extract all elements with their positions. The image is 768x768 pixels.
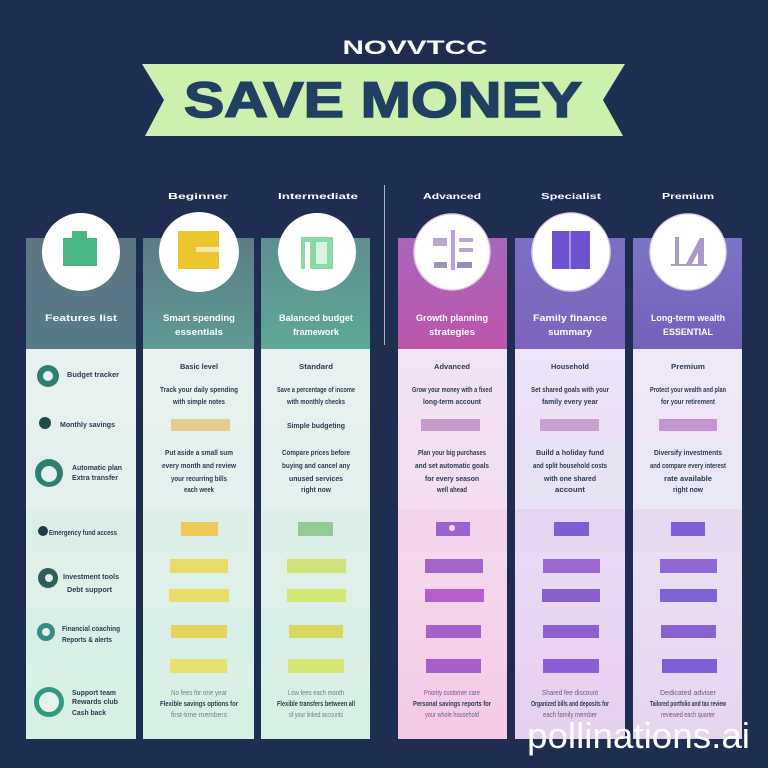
icon: pink ledger xyxy=(414,214,490,290)
plan cells: your whole household xyxy=(425,710,479,719)
icon: yellow ledger xyxy=(159,212,239,292)
plan heading xyxy=(416,313,488,337)
plan cells: Build a holiday fund xyxy=(536,448,604,457)
plan cells: No fees for one year xyxy=(171,688,227,697)
title banner xyxy=(142,64,625,136)
plan cells: Advanced xyxy=(434,362,470,371)
plan cells: Household xyxy=(551,362,589,371)
plan cells: with one shared xyxy=(543,474,596,483)
plan cells: Priority customer care xyxy=(424,688,480,697)
feature labels with icons: Extra transfer xyxy=(72,473,118,482)
plan cells: for every season xyxy=(425,474,479,483)
plan cells: Protect your wealth and plan xyxy=(650,385,726,394)
feature labels with icons: Budget tracker xyxy=(67,370,119,379)
icon: lavender ledger xyxy=(650,214,726,290)
column top labels: Beginner xyxy=(168,192,228,201)
plan cells: Dedicated adviser xyxy=(660,688,716,697)
panel: features column xyxy=(26,213,136,739)
plan heading: ESSENTIAL xyxy=(663,327,713,337)
feature labels with icons xyxy=(34,365,122,717)
feature labels with icons: Cash back xyxy=(72,708,107,717)
plan cells: Simple budgeting xyxy=(287,421,345,430)
plan heading: Balanced budget xyxy=(279,313,353,323)
plan heading xyxy=(279,313,353,337)
feature labels with icons: Financial coaching xyxy=(62,624,120,633)
plan cells: for your retirement xyxy=(661,397,715,406)
plan cells: with simple notes xyxy=(172,397,225,406)
column top labels: Intermediate xyxy=(278,192,359,201)
plan cells: Flexible savings options for xyxy=(160,699,238,708)
title banner: SAVE MONEY xyxy=(184,72,582,128)
panel: plan column 3 xyxy=(398,214,507,739)
feature labels with icons: Monthly savings xyxy=(60,420,115,429)
plan heading xyxy=(651,313,725,337)
panel: plan column 4 xyxy=(515,213,625,739)
column top labels: Specialist xyxy=(541,192,602,201)
plan cells xyxy=(277,362,355,719)
plan cells: Low fees each month xyxy=(288,688,344,697)
panel: plan column 1 xyxy=(143,212,254,739)
plan cells: each week xyxy=(184,485,215,494)
plan cells: Organized bills and deposits for xyxy=(531,699,609,708)
plan heading: Growth planning xyxy=(416,313,488,323)
feature labels with icons: Reports & alerts xyxy=(62,635,112,644)
plan cells: long-term account xyxy=(423,397,481,406)
plan heading: Family finance xyxy=(533,313,607,323)
column top labels: Advanced xyxy=(423,192,481,201)
plan cells: right now xyxy=(301,485,331,494)
plan heading xyxy=(163,313,235,337)
plan cells: Personal savings reports for xyxy=(413,699,491,708)
plan cells: Basic level xyxy=(180,362,218,371)
plan cells: family every year xyxy=(542,397,598,406)
plan cells: Track your daily spending xyxy=(160,385,238,394)
plan cells: buying and cancel any xyxy=(282,461,351,470)
feature labels with icons: Automatic plan xyxy=(72,463,122,472)
feature labels with icons: Debt support xyxy=(67,585,112,594)
center divider xyxy=(384,185,385,345)
plan heading: strategies xyxy=(429,327,475,337)
plan cells xyxy=(650,362,726,719)
icon: wallet xyxy=(42,213,120,291)
plan heading: framework xyxy=(293,327,340,337)
watermark: pollinations.ai xyxy=(527,715,750,756)
plan cells: Flexible transfers between all xyxy=(277,699,355,708)
plan cells xyxy=(412,362,492,719)
plan cells: Put aside a small sum xyxy=(165,448,233,457)
plan cells: with monthly checks xyxy=(286,397,345,406)
plan cells: account xyxy=(555,485,586,494)
plan cells: right now xyxy=(673,485,703,494)
plan cells: Save a percentage of income xyxy=(277,385,355,394)
plan cells: your recurring bills xyxy=(171,474,227,483)
column top labels xyxy=(168,192,714,201)
plan heading: summary xyxy=(548,327,592,337)
plan cells: Grow your money with a fixed xyxy=(412,385,492,394)
plan cells: Shared fee discount xyxy=(542,688,599,697)
plan cells: every month and review xyxy=(162,461,236,470)
plan cells: each family member xyxy=(543,710,597,719)
feature labels with icons: Investment tools xyxy=(63,572,119,581)
icon: green ledger xyxy=(278,213,356,291)
plan heading: Smart spending xyxy=(163,313,235,323)
plan cells: Premium xyxy=(671,362,705,371)
kicker title: NOVVTCC xyxy=(342,38,488,59)
plan heading: essentials xyxy=(175,327,223,337)
feature heading: Features list xyxy=(45,313,117,323)
plan cells: unused services xyxy=(289,474,343,483)
plan cells: Standard xyxy=(299,362,333,371)
plan cells: and set automatic goals xyxy=(415,461,489,470)
plan cells: Compare prices before xyxy=(282,448,350,457)
plan cells: first-time members xyxy=(171,710,227,719)
column top labels: Premium xyxy=(662,192,714,201)
plan cells xyxy=(160,362,238,719)
plan cells: Set shared goals with your xyxy=(531,385,609,394)
plan heading xyxy=(533,313,607,337)
plan cells: Plan your big purchases xyxy=(418,448,486,457)
panel: plan column 2 xyxy=(261,213,370,739)
plan cells: Diversify investments xyxy=(654,448,722,457)
feature labels with icons: Rewards club xyxy=(72,697,118,706)
plan cells: of your linked accounts xyxy=(289,710,343,719)
plan cells: and compare every interest xyxy=(650,461,726,470)
plan heading: Long-term wealth xyxy=(651,313,725,323)
plan cells: Tailored portfolio and tax review xyxy=(650,699,726,708)
plan cells: well ahead xyxy=(436,485,467,494)
feature labels with icons: Emergency fund access xyxy=(49,528,117,537)
icon: violet ledger xyxy=(532,213,610,291)
plan cells: reviewed each quarter xyxy=(661,710,715,719)
panel: plan column 5 xyxy=(633,214,742,739)
feature labels with icons: Support team xyxy=(72,688,116,697)
plan cells xyxy=(531,362,609,719)
plan cells: rate available xyxy=(664,474,712,483)
plan cells: and split household costs xyxy=(533,461,607,470)
